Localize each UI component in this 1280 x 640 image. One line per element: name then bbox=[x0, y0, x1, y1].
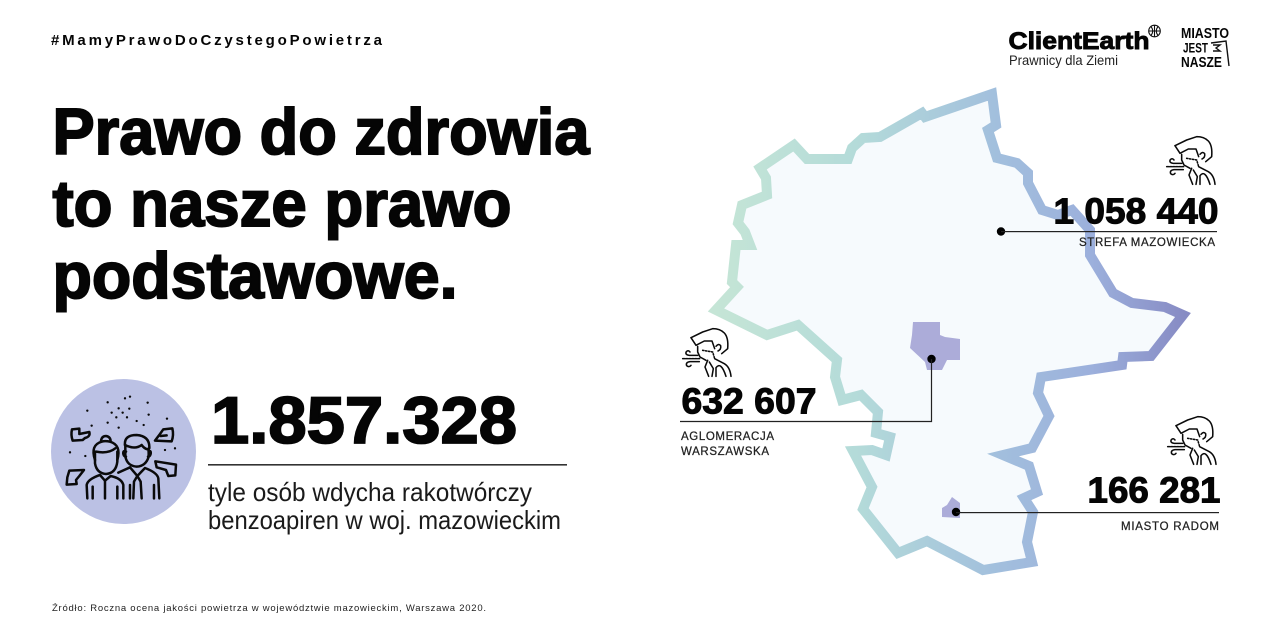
callout: Strefa Mazowiecka: 1 058 440 bbox=[1054, 190, 1218, 232]
logo: Miasto jest nasze: NASZE bbox=[1181, 54, 1222, 71]
map: Mazowieckie region outline bbox=[716, 94, 1183, 570]
map: Radom area bbox=[942, 497, 960, 518]
title: Prawo do zdrowia bbox=[52, 95, 590, 168]
big number: 1.857.328 bbox=[211, 383, 517, 457]
description bbox=[208, 477, 561, 535]
hashtag: #MamyPrawoDoCzystegoPowietrza bbox=[51, 32, 383, 49]
logo: ClientEarth: ClientEarth bbox=[1008, 28, 1150, 55]
callout: Miasto Radom bbox=[952, 417, 1220, 533]
logo: Miasto jest nasze: MIASTO bbox=[1181, 26, 1229, 42]
logo: Miasto jest nasze bbox=[1181, 26, 1229, 71]
map: Warsaw area bbox=[910, 322, 960, 370]
title bbox=[52, 95, 590, 312]
divider line bbox=[208, 464, 567, 466]
logo: ClientEarth bbox=[1008, 25, 1160, 68]
callout: Miasto Radom: 166 281 bbox=[1088, 470, 1220, 510]
callout: Aglomeracja Warszawska bbox=[680, 329, 936, 458]
icon: people in polluted air bbox=[51, 379, 196, 524]
description: tyle osób wdycha rakotwórczy bbox=[208, 477, 532, 507]
title: podstawowe. bbox=[52, 239, 458, 312]
callout: Aglomeracja Warszawska: WARSZAWSKA bbox=[681, 446, 769, 458]
logo: ClientEarth: Prawnicy dla Ziemi bbox=[1009, 52, 1118, 68]
logo: Miasto jest nasze: JEST bbox=[1183, 40, 1208, 56]
callout: Aglomeracja Warszawska: 632 607 bbox=[682, 380, 816, 422]
callout: Miasto Radom: MIASTO RADOM bbox=[1121, 521, 1219, 533]
callout: Strefa Mazowiecka: STREFA MAZOWIECKA bbox=[1079, 237, 1215, 249]
title: to nasze prawo bbox=[52, 167, 512, 240]
callout: Aglomeracja Warszawska: AGLOMERACJA bbox=[681, 431, 774, 443]
source note: Źródło: Roczna ocena jakości powietrza w województwie mazowieckim, Warszawa 2020. bbox=[52, 603, 486, 614]
description: benzoapiren w woj. mazowieckim bbox=[208, 505, 561, 535]
callout: Strefa Mazowiecka bbox=[997, 137, 1218, 249]
